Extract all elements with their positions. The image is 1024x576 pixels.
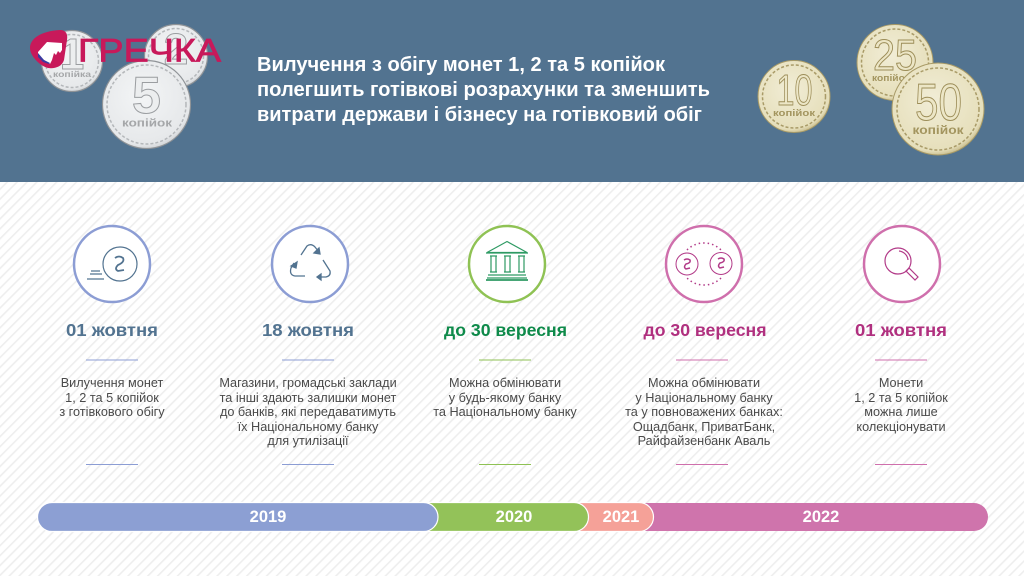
coin: 1 kopiyka (42, 30, 102, 92)
logo mark (30, 30, 67, 68)
description: у будь-якому банку (449, 391, 562, 405)
icon: recycle arrows (272, 226, 348, 302)
description: колекціонувати (856, 420, 946, 434)
description (854, 376, 948, 434)
coin: 5 kopiyok: копійок (122, 118, 173, 130)
date: 01 жовтня (66, 320, 158, 340)
description: у Національному банку (635, 391, 773, 405)
icon: coin exchange (666, 226, 742, 302)
description: для утилізації (267, 434, 349, 448)
description: Можна обмінювати (449, 376, 561, 390)
headline (257, 54, 710, 126)
description: Магазини, громадські заклади (219, 376, 397, 390)
coin: 2 kopiyky (144, 24, 208, 88)
description: Можна обмінювати (648, 376, 760, 390)
date: до 30 вересня (444, 320, 567, 340)
date: до 30 вересня (644, 320, 766, 340)
coin: 5 kopiyok: 5 (132, 67, 161, 125)
description: та Національному банку (433, 405, 577, 419)
description: та у повноважених банках: (625, 405, 783, 419)
column 1: 01 жовтня (59, 226, 165, 465)
segment: 2020 (410, 502, 588, 532)
segment: 2019 (38, 502, 438, 532)
coin: 50 kopiyok: копійок (912, 123, 965, 137)
description (59, 376, 165, 419)
segment: 2019: 2019 (250, 508, 286, 526)
coin: 50 kopiyok (892, 63, 984, 155)
date: 01 жовтня (855, 320, 947, 340)
coin: 1 kopiyka: 1 (60, 30, 84, 79)
icon: moving coin (74, 226, 150, 302)
coin: 25 kopiyok: копійок (872, 73, 911, 83)
description: 1, 2 та 5 копійок (854, 391, 948, 405)
headline: витрати держави і бізнесу на готівковий обіг (257, 104, 702, 126)
segment: 2021: 2021 (603, 508, 639, 526)
description: до банків, які передаватимуть (220, 405, 396, 419)
coin: 1 kopiyka: копійка (53, 69, 91, 79)
icon: bank (469, 226, 545, 302)
description: з готівкового обігу (59, 405, 165, 419)
column 3: до 30 вересня (433, 226, 577, 465)
segment: 2020: 2020 (496, 508, 532, 526)
headline: Вилучення з обігу монет 1, 2 та 5 копійок (257, 54, 666, 76)
description (219, 376, 397, 448)
timeline (38, 502, 988, 532)
coin: 10 kopiyok (758, 60, 830, 132)
logo: Гречка (30, 30, 221, 68)
description (625, 376, 783, 448)
column 5: 01 жовтня (854, 226, 948, 465)
coin: 5 kopiyok (102, 60, 190, 148)
date: 18 жовтня (262, 320, 354, 340)
coin: 50 kopiyok: 50 (915, 74, 962, 132)
logo wordmark: ГРЕЧКА (78, 32, 221, 68)
icon: magnifier (864, 226, 940, 302)
description: Вилучення монет (61, 376, 163, 390)
coin: 2 kopiyky: 2 (164, 25, 188, 74)
background hatch (0, 182, 1024, 576)
description: можна лише (864, 405, 938, 419)
description: Ощадбанк, ПриватБанк, (633, 420, 775, 434)
description: Райфайзенбанк Аваль (638, 434, 771, 448)
description: та інші здають залишки монет (220, 391, 397, 405)
coin: 25 kopiyok: 25 (873, 31, 917, 80)
headline: полегшить готівкові розрахунки та зменшить (257, 79, 710, 101)
description: Монети (879, 376, 923, 390)
description: 1, 2 та 5 копійок (65, 391, 159, 405)
description (433, 376, 577, 419)
segment: 2022 (620, 503, 988, 531)
segment: 2021 (560, 502, 654, 532)
description: їх Національному банку (237, 420, 379, 434)
header band (0, 0, 1024, 182)
column 4: до 30 вересня (625, 226, 783, 465)
coin: 10 kopiyok: копійок (773, 108, 816, 118)
coin: 25 kopiyok (857, 24, 933, 100)
column 2: 18 жовтня (219, 226, 397, 465)
segment: 2022: 2022 (803, 508, 839, 526)
coin: 10 kopiyok: 10 (776, 66, 812, 115)
